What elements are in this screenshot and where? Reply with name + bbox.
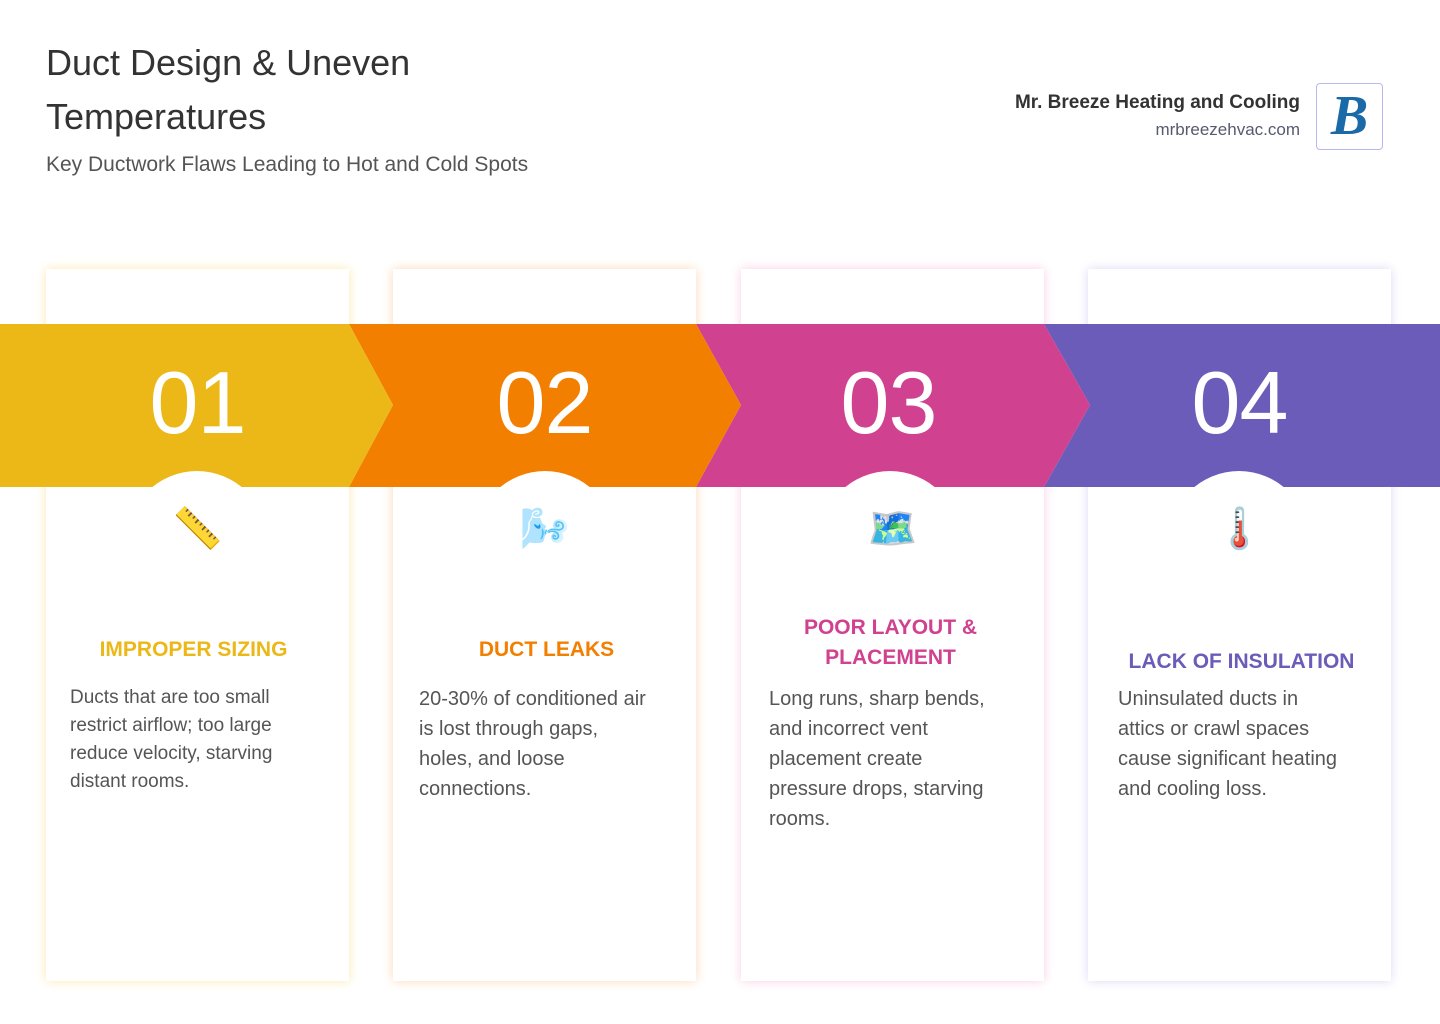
text: pressure drops, starving	[769, 778, 984, 800]
texts: Ducts that are too small restrict airflow; too large reduce velocity, starving distant rooms.	[70, 687, 272, 792]
text: and incorrect vent	[769, 718, 928, 740]
card 3	[741, 269, 1044, 981]
circles	[127, 471, 267, 611]
numbers: 01	[150, 353, 245, 452]
brand text	[1015, 92, 1300, 139]
text: PLACEMENT	[825, 646, 956, 669]
text: POOR LAYOUT &	[804, 616, 977, 639]
brand text: Mr. Breeze Heating and Cooling	[1015, 92, 1300, 113]
text: LACK OF INSULATION	[1129, 650, 1354, 673]
arrow band	[0, 324, 1440, 487]
text: is lost through gaps,	[419, 718, 598, 740]
text: 🌡️	[1215, 507, 1264, 551]
text: rooms.	[769, 808, 830, 830]
text: DUCT LEAKS	[479, 638, 614, 661]
text: 20-30% of conditioned air	[419, 688, 646, 710]
text: and cooling loss.	[1118, 778, 1267, 800]
text: 🌬️	[520, 507, 569, 551]
text: 03	[841, 353, 936, 452]
headings: IMPROPER SIZING	[100, 638, 287, 661]
text: connections.	[419, 778, 531, 800]
text: Long runs, sharp bends,	[769, 688, 985, 710]
text: 🗺️	[868, 507, 917, 551]
text: holes, and loose	[419, 748, 565, 770]
logo	[1316, 83, 1383, 150]
text: placement create	[769, 748, 922, 770]
text: 04	[1192, 353, 1287, 452]
logo: B	[1331, 85, 1368, 147]
title	[46, 42, 410, 137]
card 2	[393, 269, 696, 981]
text: cause significant heating	[1118, 748, 1337, 770]
text: attics or crawl spaces	[1118, 718, 1309, 740]
title: Temperatures	[46, 96, 266, 137]
brand text: mrbreezehvac.com	[1155, 120, 1300, 139]
text: Uninsulated ducts in	[1118, 688, 1298, 710]
title: Duct Design & Uneven	[46, 42, 410, 83]
card 4	[1088, 269, 1391, 981]
text: 02	[497, 353, 592, 452]
subtitle: Key Ductwork Flaws Leading to Hot and Cold Spots	[46, 153, 528, 176]
icons: 📏	[173, 507, 222, 551]
card 1	[46, 269, 349, 981]
